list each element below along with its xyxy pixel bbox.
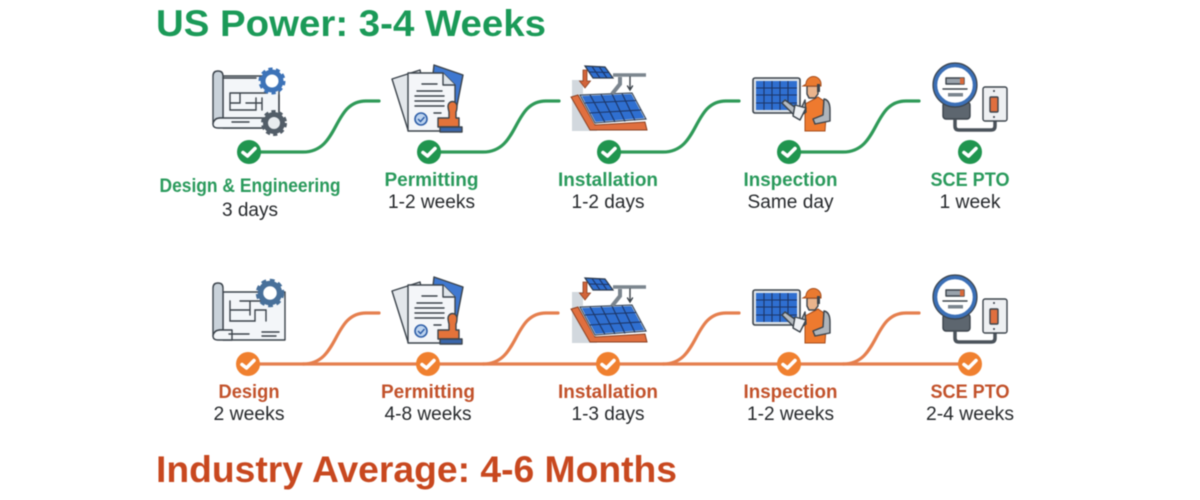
step label: SCE PTO: SCE PTO (930, 382, 1010, 403)
duration: 2-4 weeks: 2-4 weeks (926, 404, 1014, 425)
status check: permitting (416, 352, 440, 376)
step label: Inspection: Inspection (744, 170, 838, 191)
duration: 1-2 weeks: 1-2 weeks (388, 192, 475, 213)
step label: Installation: Installation (558, 382, 658, 403)
step label: Installation: Installation (558, 170, 658, 191)
duration: 3 days: 3 days (222, 200, 278, 221)
icon: inspector with panel (753, 77, 830, 131)
icon: permit documents and stamp (392, 277, 463, 344)
branch: permitting to installation (483, 313, 558, 364)
icon: blueprint with one gear (213, 281, 285, 340)
branch: installation to inspection (663, 313, 739, 364)
icon: electric meter and switch (933, 275, 1007, 342)
panel: US Power timeline (160, 63, 1010, 221)
status check: installation (596, 352, 620, 376)
title: Industry Average: Industry Average: 4-6 Months (156, 449, 677, 490)
duration: 4-8 weeks: 4-8 weeks (384, 404, 472, 425)
icon: permit documents and stamp (392, 65, 463, 132)
step label: SCE PTO: SCE PTO (930, 170, 1010, 191)
icon: solar panel installation (571, 278, 647, 343)
status check: installation (597, 140, 621, 164)
status check: design (237, 140, 261, 164)
icon: solar panel installation (571, 66, 647, 131)
icon: electric meter and switch (933, 63, 1007, 130)
status check: PTO (958, 140, 982, 164)
title: US Power: US Power: 3-4 Weeks (156, 3, 546, 44)
step label: Permitting: Permitting (381, 382, 475, 403)
step label: Permitting: Permitting (384, 170, 478, 191)
duration: 1-3 days: 1-3 days (572, 404, 644, 425)
duration: Same day: Same day (748, 192, 834, 213)
connector: design to permitting (260, 101, 379, 152)
step label: Design: Design (218, 382, 280, 403)
status check: inspection (777, 140, 801, 164)
panel: Industry Average timeline (213, 275, 1014, 425)
step label: Design & Engineering: Design & Engineering (160, 176, 340, 197)
branch: design to permitting (303, 313, 379, 364)
connector: permitting to installation (440, 101, 559, 152)
duration: 2 weeks: 2 weeks (214, 404, 284, 425)
duration: 1-2 days: 1-2 days (572, 192, 644, 213)
step label: Inspection: Inspection (744, 382, 838, 403)
duration: 1-2 weeks: 1-2 weeks (747, 404, 834, 425)
icon: inspector with panel (753, 288, 830, 343)
status check: PTO (958, 352, 982, 376)
connector: inspection to PTO (800, 101, 919, 152)
duration: 1 week: 1 week (940, 192, 1001, 213)
icon: blueprint with two gears (213, 70, 285, 134)
baseline connector (249, 362, 970, 366)
status check: permitting (417, 140, 441, 164)
status check: design (236, 352, 260, 376)
connector: installation to inspection (620, 101, 739, 152)
branch: inspection to PTO (843, 313, 919, 364)
status check: inspection (777, 352, 801, 376)
